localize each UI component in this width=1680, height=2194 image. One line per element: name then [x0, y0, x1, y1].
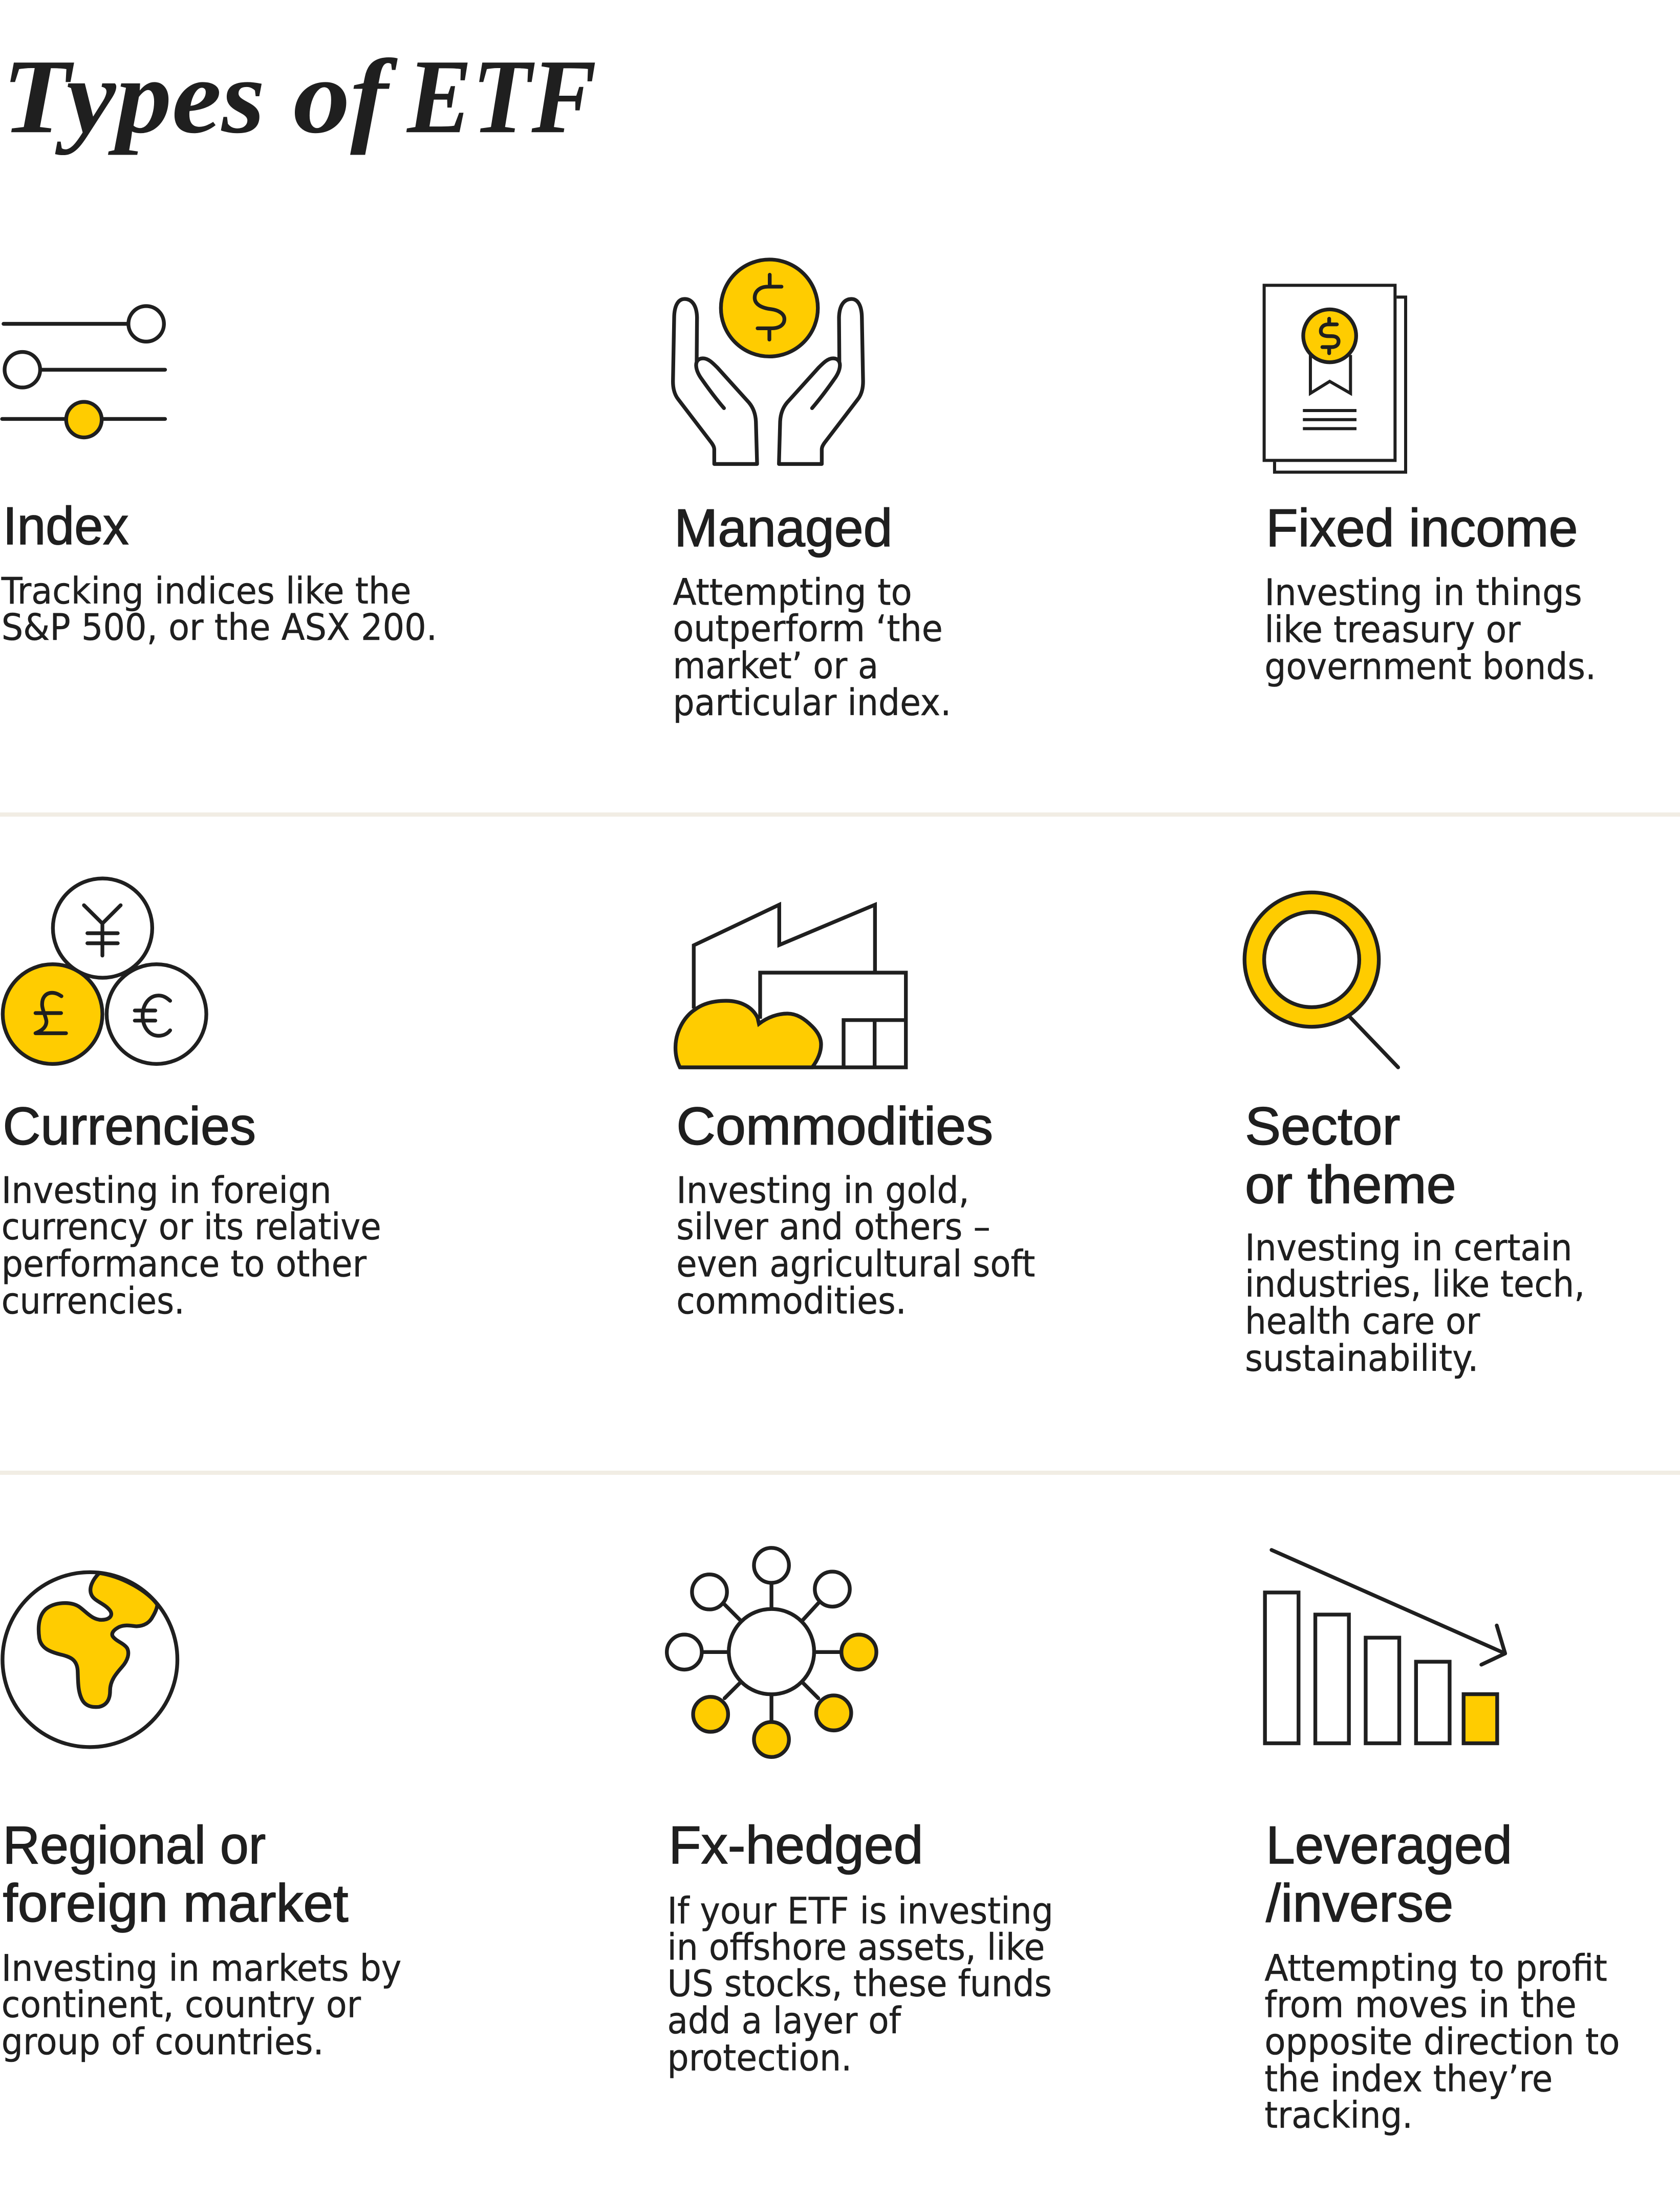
heading: Leveraged /inverse — [1266, 1816, 1512, 1933]
text: Leveraged description: the index they’re — [1264, 2057, 1553, 2100]
text: Currencies description: currencies. — [2, 1280, 185, 1322]
title: Types — [2, 37, 265, 155]
icon: bond document with rosette — [1264, 285, 1406, 472]
text: Currencies description: currency or its relative — [2, 1206, 381, 1248]
text: Commodities description: even agricultural soft — [676, 1243, 1035, 1285]
panel: Fx-hedged — [667, 1548, 1053, 2079]
heading: Regional or foreign market: Regional or — [3, 1816, 266, 1875]
text: Sector or theme description: sustainability. — [1245, 1337, 1478, 1380]
text: Managed description: market’ or a — [673, 644, 878, 687]
heading: Managed: Managed — [674, 499, 892, 558]
text: Fx-hedged description: US stocks, these funds — [667, 1963, 1052, 2005]
text: Leveraged description: opposite direction to — [1264, 2020, 1620, 2063]
heading: Sector or theme: Sector — [1245, 1096, 1400, 1156]
icon: sliders — [2, 306, 165, 438]
panel: Sector or theme — [1244, 892, 1585, 1380]
heading: Leveraged /inverse: /inverse — [1266, 1874, 1453, 1933]
text: Fixed income description — [1264, 571, 1596, 688]
text: Managed description: Attempting to — [673, 571, 912, 613]
text: Regional description: continent, country or — [2, 1984, 361, 2026]
panel: Managed — [673, 260, 951, 724]
title: ETF — [406, 37, 597, 155]
text: Currencies description — [2, 1169, 381, 1322]
text: Regional description: Investing in markets by — [2, 1947, 401, 1990]
heading: Sector or theme: or theme — [1245, 1155, 1456, 1215]
text: Index description — [1, 570, 437, 649]
text: Commodities description: commodities. — [676, 1280, 907, 1322]
text: Currencies description: performance to other — [2, 1243, 367, 1285]
text: Commodities description: silver and others – — [676, 1206, 990, 1248]
text: Fixed income description: Investing in things — [1264, 571, 1582, 614]
heading: Leveraged /inverse: Leveraged — [1266, 1816, 1512, 1875]
panel: Commodities — [676, 905, 1035, 1322]
title — [2, 37, 597, 155]
text: Index description: Tracking indices like the — [1, 570, 411, 612]
text: Managed description: particular index. — [673, 681, 951, 724]
icon: falling bars with arrow — [1265, 1550, 1505, 1744]
text: Regional description — [2, 1947, 401, 2063]
panel: Index — [1, 306, 437, 649]
heading: Fx-hedged: Fx-hedged — [669, 1816, 923, 1875]
icon: hands holding coin — [673, 260, 863, 464]
panel: Regional or foreign market — [2, 1572, 401, 2063]
panel: Fixed income — [1264, 285, 1596, 688]
text: Fx-hedged description — [667, 1889, 1053, 2079]
title: of — [293, 37, 398, 155]
text: Regional description: group of countries. — [2, 2020, 324, 2063]
heading: Index: Index — [3, 497, 128, 556]
heading: Regional or foreign market: foreign market — [3, 1874, 349, 1933]
icon: network hub — [667, 1548, 876, 1757]
text: Leveraged description — [1264, 1947, 1620, 2136]
heading: Regional or foreign market — [3, 1816, 349, 1933]
heading: Sector or theme — [1245, 1096, 1456, 1215]
text: Sector or theme description — [1245, 1227, 1585, 1380]
text: Fx-hedged description: add a layer of — [667, 1999, 902, 2042]
text: Fx-hedged description: If your ETF is investing — [667, 1889, 1053, 1932]
text: Fixed income description: like treasury or — [1264, 608, 1521, 651]
text: Index description: S&P 500, or the ASX 200. — [2, 606, 437, 649]
text: Fx-hedged description: protection. — [667, 2036, 852, 2079]
panel: Currencies — [2, 878, 381, 1322]
icon: globe — [3, 1572, 178, 1747]
heading: Currencies: Currencies — [3, 1096, 256, 1156]
icon: currency coins — [3, 878, 206, 1064]
icon: factory with bush — [676, 905, 906, 1067]
text: Managed description — [673, 571, 951, 724]
panel: Leveraged/inverse — [1264, 1550, 1620, 2136]
text: Commodities description — [676, 1169, 1035, 1322]
text: Leveraged description: tracking. — [1264, 2094, 1413, 2136]
icon: magnifying glass — [1244, 892, 1398, 1067]
text: Sector or theme description: Investing in certain — [1245, 1227, 1573, 1269]
text: Fx-hedged description: in offshore assets, like — [667, 1926, 1045, 1969]
text: Leveraged description: from moves in the — [1264, 1984, 1577, 2026]
text: Commodities description: Investing in gold, — [676, 1169, 970, 1212]
text: Sector or theme description: industries, like tech, — [1245, 1263, 1585, 1305]
heading: Fixed income: Fixed income — [1266, 499, 1578, 558]
heading: Commodities: Commodities — [676, 1096, 993, 1156]
text: Leveraged description: Attempting to profit — [1264, 1947, 1607, 1990]
text: Sector or theme description: health care or — [1245, 1300, 1480, 1343]
text: Managed description: outperform ‘the — [673, 607, 943, 650]
text: Fixed income description: government bonds. — [1264, 646, 1596, 688]
text: Currencies description: Investing in foreign — [2, 1169, 332, 1212]
